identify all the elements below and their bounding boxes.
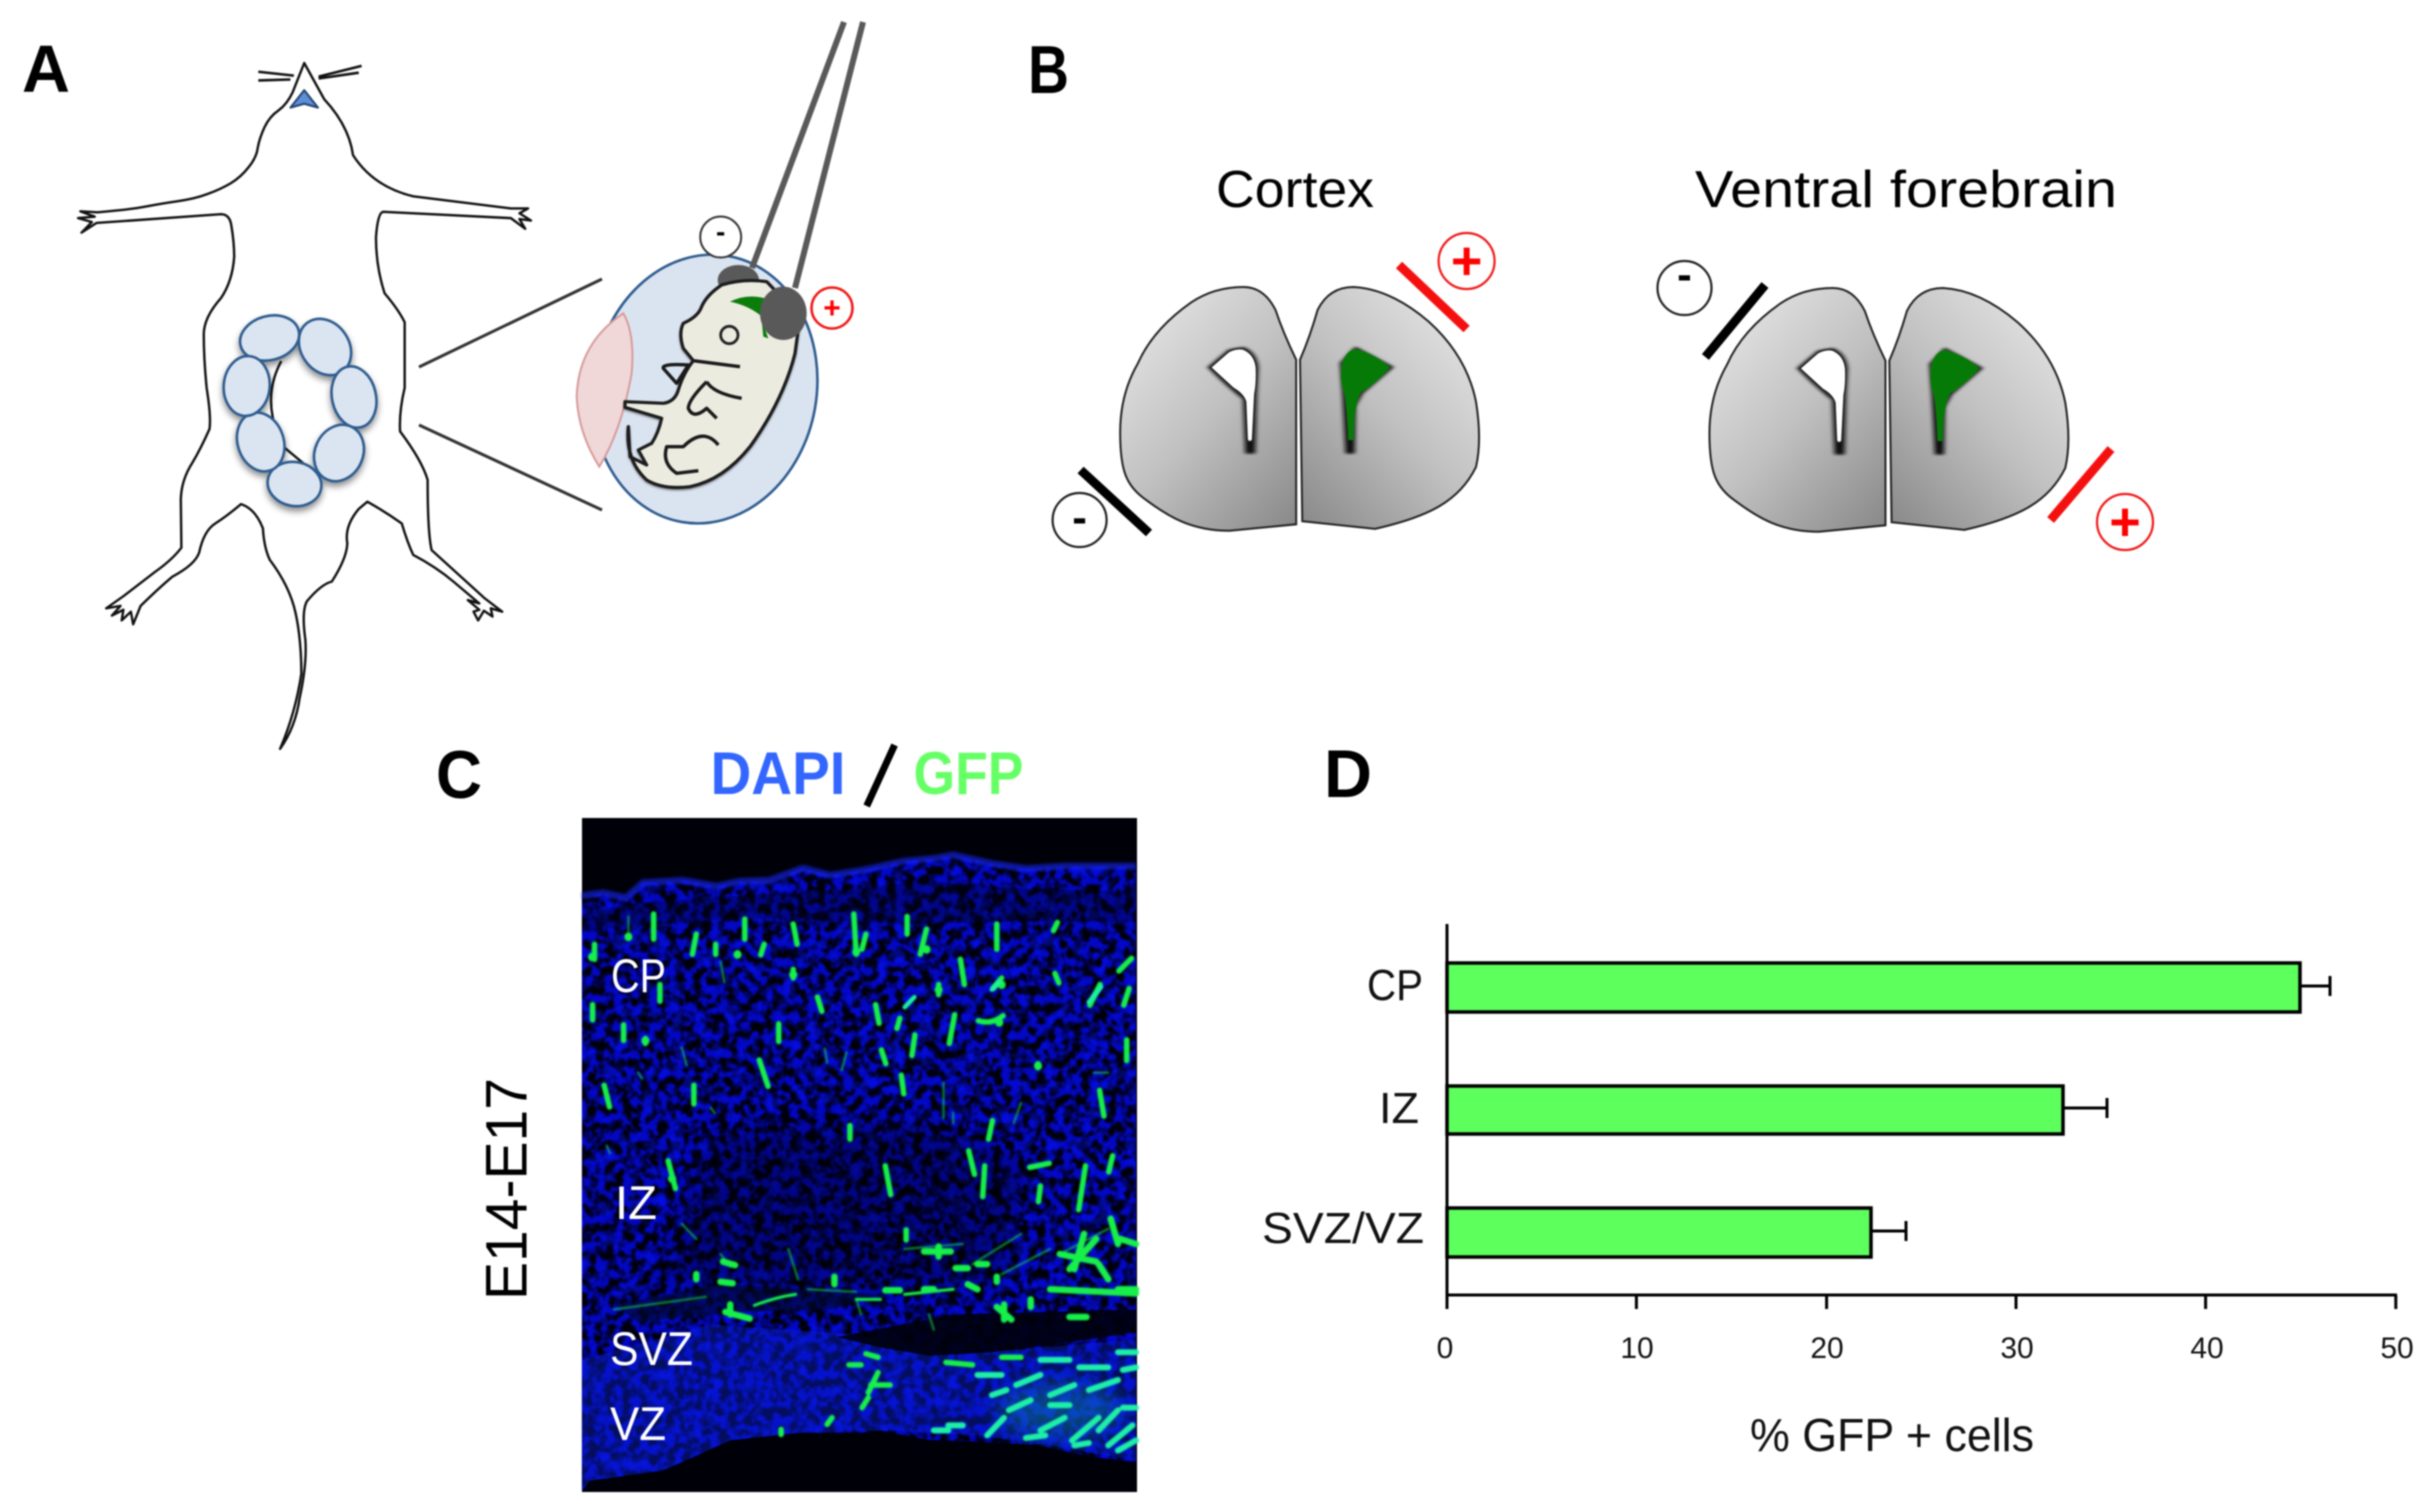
electrode: cortex positive: [1399, 265, 1467, 329]
category labels: CP: [1367, 961, 1423, 1010]
micrograph: DAPI and GFP stained cortex: [582, 818, 1137, 1492]
bars: [1447, 963, 2300, 1257]
symbol: cortex negative: -: [1072, 493, 1087, 542]
tick labels: 0: [1437, 1332, 1453, 1365]
zoom lines: [419, 279, 602, 510]
category labels: IZ: [1379, 1084, 1419, 1133]
panel label: D: D: [1324, 736, 1372, 812]
panel A: mouse and embryo illustration: [78, 22, 863, 749]
heading: DAPI / GFP: [710, 740, 1024, 807]
embryo close-up with electrodes: [572, 237, 838, 541]
region labels on micrograph: VZ: [610, 1397, 666, 1450]
heading: Cortex: Cortex: [1216, 161, 1374, 219]
mouse body outline: [78, 63, 531, 749]
brain section: ventral forebrain electroporation: [1709, 288, 2068, 532]
GFP cells: [592, 914, 1136, 1434]
brain section: cortex electroporation: [1120, 287, 1479, 531]
x axis title: % GFP + cells: [1750, 1409, 2034, 1461]
heading: Ventral forebrain: Ventral forebrain: [1695, 161, 2117, 219]
category labels: SVZ/VZ: [1262, 1204, 1424, 1253]
region labels on micrograph: SVZ: [610, 1322, 693, 1375]
rotated label: E14-E17: E14-E17: [474, 1078, 540, 1300]
tissue: [582, 855, 1136, 1491]
region labels on micrograph: [610, 949, 693, 1450]
positive pole symbol: [812, 288, 852, 328]
panel label: A: A: [22, 32, 70, 107]
negative pole symbol: [700, 216, 741, 258]
electrode: cortex negative: [1081, 470, 1149, 533]
tick labels: 30: [2000, 1332, 2034, 1365]
symbol: forebrain negative: -: [1677, 250, 1692, 299]
bar chart: percent GFP positive cells by zone: [1262, 924, 2414, 1461]
heading: DAPI / GFP: DAPI: [710, 740, 846, 807]
tick labels: 20: [1810, 1332, 1844, 1365]
tick labels: 50: [2380, 1332, 2414, 1365]
symbol: cortex positive: [1439, 231, 1495, 291]
embryos in uterus: [221, 309, 382, 510]
category labels: [1262, 961, 1424, 1253]
tick labels: [1437, 1332, 2414, 1365]
symbol: cortex negative: [1053, 493, 1107, 547]
region labels on micrograph: CP: [611, 949, 666, 1002]
panel label: B: B: [1028, 32, 1069, 108]
tick labels: 40: [2190, 1332, 2224, 1365]
error bars: [1871, 976, 2330, 1241]
electrode forceps: [752, 22, 863, 288]
symbol: forebrain positive: [2097, 492, 2153, 552]
symbol: cortex positive: +: [1451, 231, 1482, 291]
symbol: forebrain negative: [1658, 250, 1712, 315]
panel label: C: C: [436, 737, 482, 813]
tick labels: 10: [1620, 1332, 1654, 1365]
electrode: forebrain positive: [2051, 449, 2111, 520]
negative pole symbol: -: [716, 216, 725, 247]
region labels on micrograph: IZ: [615, 1176, 657, 1229]
positive pole symbol: +: [823, 292, 841, 325]
electrode: forebrain negative: [1705, 285, 1765, 357]
axes and ticks: [1446, 924, 2397, 1309]
symbol: forebrain positive: +: [2109, 492, 2141, 552]
heading: DAPI / GFP: GFP: [914, 740, 1024, 807]
